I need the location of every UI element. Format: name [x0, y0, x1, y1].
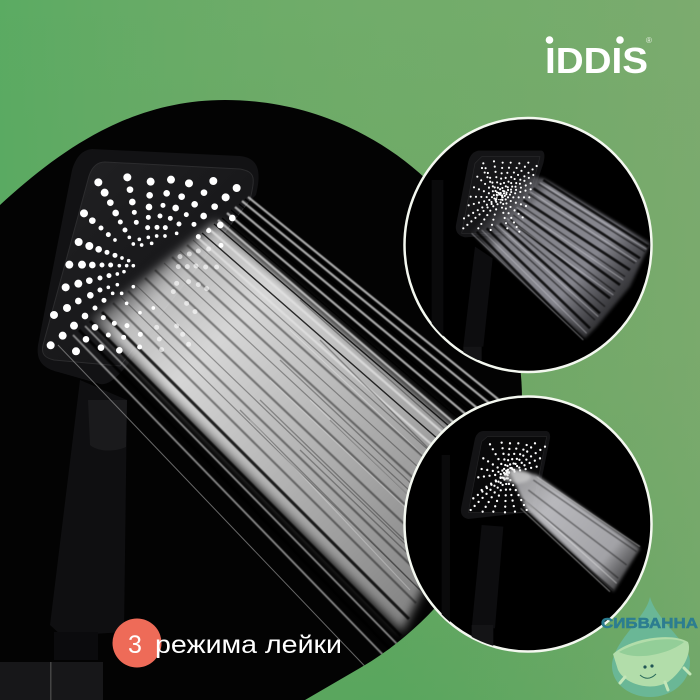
- spray: [470, 175, 650, 338]
- logo i dots: [546, 36, 624, 44]
- thin lower edge line: [58, 345, 378, 680]
- bright focused centre: [503, 470, 531, 483]
- dark gaps through core: [112, 244, 423, 604]
- water spray: [58, 197, 509, 680]
- shower handle: [0, 380, 127, 700]
- panel: circle inset, focused spray mode: [404, 396, 652, 652]
- caption digit: 3: [128, 631, 142, 659]
- wall pipe: [442, 455, 450, 635]
- radial nozzle dots: [471, 443, 545, 512]
- caption label: режима лейки: [155, 631, 342, 659]
- head body: [461, 431, 550, 519]
- coral number badge: [112, 618, 162, 668]
- radial nozzle dots: [463, 161, 537, 232]
- wall pipe: [432, 180, 443, 347]
- panel: main black photo with large shower head: [0, 100, 522, 700]
- shower head body: [38, 149, 259, 384]
- shower head nozzle dots: [51, 177, 237, 351]
- water drop: [612, 597, 690, 697]
- logo: IDDIS: IDDIS: [545, 40, 648, 81]
- handle: [463, 247, 493, 347]
- watermark text: СИБВАННА: [601, 615, 698, 632]
- lower streaks: [79, 312, 409, 652]
- bright spray core: [92, 222, 487, 632]
- panel: circle inset, wide spray mode: [404, 118, 652, 372]
- handle: [472, 525, 503, 628]
- head body: [456, 151, 544, 237]
- watermark: Sibvanna: [601, 597, 698, 697]
- spray: [508, 468, 640, 592]
- caption: 3 shower modes: [128, 631, 342, 659]
- bathtub: [613, 637, 690, 690]
- registered mark: ®: [646, 36, 652, 45]
- upper fine streaks: [196, 196, 500, 444]
